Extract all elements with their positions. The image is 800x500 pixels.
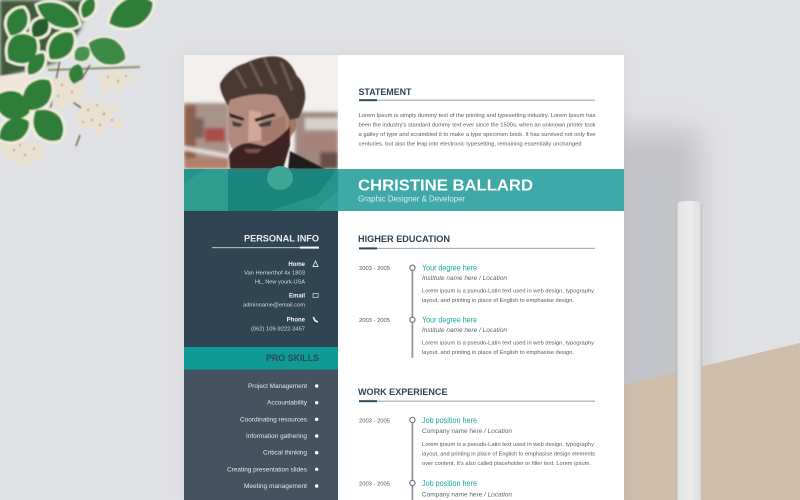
heading: statement: STATEMENT [358, 87, 412, 98]
paper sheet [184, 55, 624, 500]
contact: home [244, 262, 306, 286]
entry: degree 1: layout, and printing in place of English to emphasise design. [422, 298, 574, 304]
job title: Graphic Designer & Developer [358, 194, 465, 204]
statement paragraph: been the industry's standard dummy text ever since the 1500s, when an unknown printer took [358, 122, 596, 128]
entry: degree 1: Institute name here / Location [422, 275, 507, 282]
skill item: Accountability [267, 400, 308, 407]
heading: higher education: HIGHER EDUCATION [358, 234, 450, 245]
heading band: pro skills [184, 347, 338, 370]
icon: email [313, 294, 318, 298]
entry: degree 1: Lorem ipsum is a pseudo-Latin text used in web design, typography [422, 289, 594, 295]
entry: degree 1: Your degree here [422, 264, 477, 272]
icon: phone [314, 317, 318, 322]
flower clusters [0, 71, 136, 168]
entry: job 1: Lorem ipsum is a pseudo-Latin text used in web design, typography [422, 442, 594, 448]
section: work experience [358, 387, 595, 500]
entry: job 1 [359, 416, 595, 467]
paper shadow [184, 55, 624, 500]
entry: degree 2: Institute name here / Location [422, 327, 507, 334]
panel: personal info [184, 211, 338, 347]
resume paper [184, 55, 624, 500]
name: CHRISTINE BALLARD [358, 178, 533, 194]
contact: home: Van Hemerthof 4x 1803 [244, 270, 305, 276]
contact: phone: (062) 109-9222-3457 [251, 326, 305, 332]
brows and eyes [229, 113, 276, 122]
entry: job 1: Company name here / Location [422, 428, 512, 435]
portrait photo [184, 55, 338, 169]
entry: degree 1: 2003 - 2005 [359, 266, 390, 272]
tan desk surface [624, 343, 800, 500]
leaves cream edges [0, 0, 163, 153]
straw prop [676, 201, 702, 500]
photo teal overlay [184, 166, 338, 211]
contact: email: Email [289, 294, 305, 300]
hair [220, 56, 305, 120]
skill item: Critical thinking [263, 450, 307, 457]
contact: phone [251, 318, 306, 332]
icon: home [313, 261, 318, 266]
wall shadow beside paper [624, 122, 708, 385]
entry: degree 1 [359, 264, 594, 304]
jacket [288, 151, 325, 169]
skill item: Information gathering [246, 433, 307, 440]
entry: degree 2: Lorem ipsum is a pseudo-Latin text used in web design, typography [422, 341, 594, 347]
entry: job 1: 2003 - 2005 [359, 418, 390, 424]
plant decoration [0, 0, 163, 168]
heading: personal info: PERSONAL INFO [244, 232, 319, 244]
leaves green centres [0, 0, 159, 149]
face [228, 93, 293, 150]
statement paragraph: a galley of type and scrambled it to make a type specimen book. It has survived not only five [358, 132, 596, 138]
entry: job 1: over content. It's also called placeholder or filler text. Lorem ipsum. [422, 461, 591, 467]
entry: degree 2: 2003 - 2005 [359, 318, 390, 324]
section: statement [358, 87, 596, 148]
skill item: Meeting management [244, 483, 307, 490]
skill item: Creating presentation slides [227, 466, 308, 473]
entry: job 2 [359, 479, 512, 498]
entry: degree 2: Your degree here [422, 316, 477, 324]
panel: pro skills list [184, 370, 338, 500]
contact: home: Home [288, 262, 306, 268]
skill item: Project Management [248, 383, 307, 390]
entry: degree 2 [359, 316, 594, 356]
beard [229, 126, 290, 169]
statement paragraph: centuries, but also the leap into electronic typesetting, remaining essentially unchanged [358, 142, 582, 148]
entry: job 2: Job position here [422, 479, 477, 488]
teal band [338, 169, 624, 211]
statement paragraph: Lorem Ipsum is simply dummy text of the printing and typesetting industry. Lorem Ipsum has [358, 113, 596, 119]
name banner [184, 166, 624, 211]
entry: job 1: Job position here [422, 416, 477, 425]
entry: job 1: layout, and printing in place of English to emphasise design elements [422, 452, 595, 458]
heading band: pro skills: PRO SKILLS [266, 353, 319, 363]
section: higher education [358, 234, 595, 358]
entry: job 2: Company name here / Location [422, 492, 512, 498]
heading: work experience: WORK EXPERIENCE [358, 387, 448, 398]
contact: email [243, 294, 305, 308]
timeline [410, 265, 415, 358]
entry: job 2: 2003 - 2005 [359, 482, 390, 488]
contact: email: adminname@email.com [243, 302, 305, 308]
entry: degree 2: layout, and printing in place of English to emphasise design. [422, 350, 574, 356]
statement paragraph [358, 113, 596, 148]
contact: home: HL, New yourk-USA [255, 280, 306, 286]
contact: phone: Phone [287, 318, 306, 324]
timeline [410, 417, 415, 500]
skill item: Coordinating resources [240, 416, 308, 423]
